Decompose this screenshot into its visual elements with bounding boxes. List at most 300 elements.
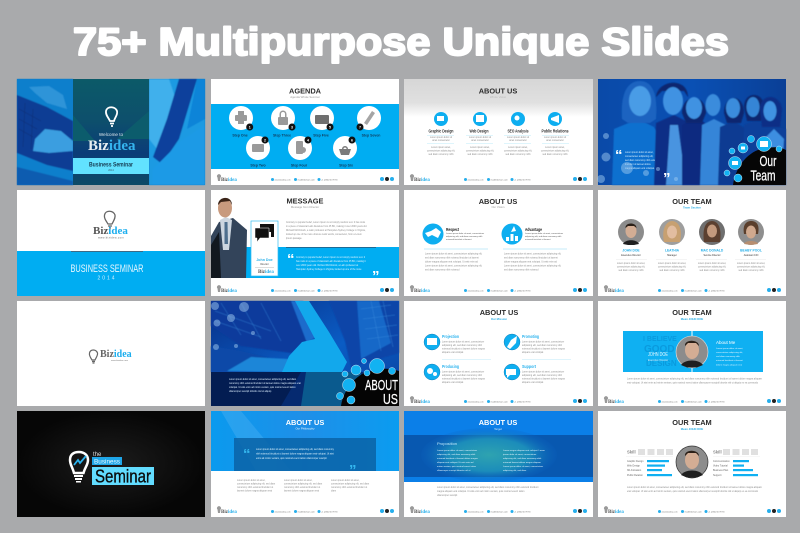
about text: Lorem ipsum dolor sit amet, consectetuer adipiscing elit, sed diam bbox=[229, 378, 296, 381]
slide: the business seminar dark bbox=[17, 411, 205, 517]
our team label: Our bbox=[760, 153, 776, 170]
band heading: Business Seminar bbox=[89, 162, 134, 168]
message text: Ipsum passage. bbox=[286, 238, 303, 240]
team roles: Executive Director bbox=[621, 254, 641, 257]
team text: Lorem ipsum dolor sit amet, bbox=[698, 262, 727, 265]
welcome text: Welcome to bbox=[99, 132, 124, 137]
heading: ABOUT US bbox=[286, 418, 324, 427]
heading: OUR TEAM bbox=[672, 418, 712, 427]
footer: Bizidea bbox=[608, 510, 624, 515]
footer: mail@domain.com bbox=[298, 511, 315, 513]
about me title: About Me bbox=[716, 340, 736, 345]
about me text bbox=[716, 347, 743, 366]
about me text: sed diam nonummy nibh bbox=[716, 356, 741, 358]
left column text: euismod tincidunt ut laoreet dolore magna bbox=[437, 457, 479, 460]
right text: sed diam nonummy nibh euismod bbox=[504, 270, 539, 272]
three columns: Lorem ipsum dolor sit amet, bbox=[284, 479, 313, 482]
cyan band bbox=[73, 158, 149, 174]
icon: bulb logo bbox=[89, 350, 98, 363]
left skill labels: Graphic Design bbox=[627, 460, 644, 463]
lorem columns: Lorem ipsum dolor sit bbox=[469, 136, 491, 139]
message text: Richard McClintock, a Latin professor at Hampden-Sydney College in Virginia, bbox=[286, 229, 366, 232]
left skill labels: Public Relation bbox=[627, 474, 644, 477]
mission text: aliquam erat volutpat bbox=[522, 381, 544, 384]
step labels: Step Two bbox=[250, 164, 266, 168]
three columns: consectetuer adipiscing elit, sed diam bbox=[331, 482, 369, 486]
subheading: Team Section bbox=[683, 206, 701, 210]
team text: Lorem ipsum dolor sit amet, bbox=[737, 262, 766, 265]
right skill labels: Business Plan bbox=[713, 469, 729, 472]
about text: ullamcorper suscipit lobortis nisl ut aliquip bbox=[229, 390, 272, 393]
lorem columns: amet consectetur bbox=[432, 139, 450, 142]
footer: +1 (234) 56 78 90 bbox=[708, 511, 725, 513]
advantage block: adipiscing elit, sed diam nonummy nibh bbox=[525, 235, 562, 238]
mission text: adipiscing elit, sed diam nonummy nibh bbox=[522, 344, 563, 347]
lorem columns: Lorem ipsum dolor sit bbox=[430, 136, 452, 139]
right text: dolore magna aliquam erat volutpat. Ut wisi enim ad bbox=[504, 260, 558, 264]
about text: nonummy nibh euismod tincidunt ut laoreet dolore magna aliquam erat bbox=[229, 382, 301, 385]
footer: mail@domain.com bbox=[490, 401, 508, 403]
mission text: adipiscing elit, sed diam nonummy nibh bbox=[442, 344, 483, 347]
left column text: Lorem ipsum dolor sit amet, consectetuer bbox=[437, 449, 477, 452]
team text: sed diam nonummy nibh bbox=[738, 270, 764, 272]
decorative bubbles bbox=[211, 302, 255, 350]
footer: www.bizidea.com bbox=[468, 401, 484, 403]
service titles: Public Relations bbox=[542, 128, 569, 134]
about me text: Lorem ipsum dolor sit amet, bbox=[716, 347, 743, 350]
footer: www.bizidea.com bbox=[468, 511, 484, 513]
quote text: has roots in a piece of classical Latin literature from 45 BC, making it bbox=[296, 260, 366, 263]
left column text: minim veniam, quis nostrud exerci tation bbox=[437, 465, 477, 468]
lorem columns: consectetuer adipiscing elit, bbox=[466, 150, 494, 152]
heading: ABOUT US bbox=[480, 308, 518, 317]
quote marks: “ bbox=[615, 147, 622, 164]
right column text: adipiscing elit, sed diam nonummy nibh bbox=[503, 457, 542, 460]
left skill labels bbox=[627, 460, 644, 477]
heading: ABOUT US bbox=[479, 86, 517, 96]
respect block: adipiscing elit, sed diam nonummy nibh bbox=[446, 235, 483, 238]
right text: sed diam nonummy nibh euismod tincidunt ut laoreet bbox=[504, 256, 558, 260]
card logo: Bizidea bbox=[258, 270, 274, 275]
dividers bbox=[626, 456, 760, 458]
slide: team portraits bbox=[598, 190, 786, 296]
footer: +1 (234) 56 78 90 bbox=[514, 290, 531, 292]
profile photo bbox=[676, 336, 708, 368]
lorem columns: Lorem ipsum amet, bbox=[508, 146, 528, 149]
about us label: ABOUT bbox=[365, 377, 398, 394]
man photo bbox=[211, 198, 247, 278]
badge numbers: 3 bbox=[291, 125, 293, 129]
slide: about us services bbox=[404, 79, 593, 185]
footer bbox=[410, 174, 587, 183]
lorem columns: amet consectetur bbox=[546, 139, 564, 142]
left text: Lorem ipsum dolor sit amet, consectetuer adipiscing elit, bbox=[425, 252, 483, 256]
three columns: nonummy nibh euismod tincidunt ut bbox=[284, 486, 320, 489]
quote text: Contrary to popular belief, Lorem Ipsum is not simply random text. It bbox=[296, 256, 365, 259]
profile panel bbox=[623, 331, 763, 372]
background words bbox=[643, 336, 677, 368]
footer bbox=[410, 396, 587, 405]
skill headings: Skill bbox=[713, 450, 722, 454]
icon circles bbox=[422, 224, 522, 244]
subheading: Our Mission bbox=[491, 317, 507, 321]
portrait: mac donald bbox=[699, 219, 725, 245]
black blob bbox=[341, 369, 399, 406]
lorem columns bbox=[427, 136, 569, 156]
team roles: Assistant CIO bbox=[744, 254, 758, 257]
about me text: euismod tincidunt ut laoreet bbox=[716, 359, 743, 362]
heading: AGENDA bbox=[289, 86, 322, 96]
heading: ABOUT US bbox=[479, 197, 517, 206]
right column text: ipsum dolor sit amet, consectetuer bbox=[503, 453, 537, 456]
title: 75+ Multipurpose Unique Slides bbox=[73, 21, 729, 64]
quote marks: ” bbox=[663, 170, 670, 187]
lorem columns: Lorem ipsum dolor sit bbox=[507, 136, 529, 139]
left text bbox=[425, 252, 483, 272]
quote marks bbox=[243, 446, 356, 479]
quote text: Lorem ipsum dolor sit amet, consectetuer adipiscing elit, sed diam nonummy bbox=[256, 448, 335, 451]
footer bbox=[604, 285, 781, 294]
badge numbers: 2 bbox=[264, 138, 266, 142]
footer: +1 (234) 56 78 90 bbox=[321, 179, 338, 181]
right text: Lorem ipsum dolor sit amet, consectetuer adipiscing elit, bbox=[504, 264, 562, 268]
team names: MAC DONALD bbox=[701, 248, 724, 252]
about me text: consectetuer adipiscing elit, bbox=[716, 351, 743, 354]
mission text: euismod tincidunt ut laoreet dolore magna bbox=[522, 378, 565, 380]
shirt photo bbox=[149, 79, 205, 185]
quote text bbox=[256, 448, 335, 460]
lorem columns: sed diam nonummy nibh bbox=[467, 154, 493, 156]
heading: MESSAGE bbox=[287, 196, 324, 206]
mission text: euismod tincidunt ut laoreet dolore magna bbox=[522, 348, 565, 350]
slide: about us vision bbox=[404, 190, 593, 296]
service text bbox=[427, 135, 569, 144]
footer bbox=[217, 174, 394, 183]
about me text: dolore magna aliquam erat bbox=[716, 364, 742, 366]
footer: mail@domain.com bbox=[684, 511, 702, 513]
heading: ABOUT US bbox=[479, 418, 517, 427]
logo url: www.bizidea.com bbox=[111, 360, 128, 362]
respect block: euismod tincidunt ut laoreet bbox=[446, 238, 472, 241]
footer bbox=[410, 285, 587, 294]
about us label: US bbox=[383, 391, 398, 408]
left column text bbox=[437, 449, 479, 472]
about text bbox=[229, 378, 301, 393]
footer: Bizidea bbox=[221, 178, 237, 183]
left text: sed diam nonummy nibh euismod bbox=[425, 270, 460, 272]
respect block: Lorem ipsum dolor sit amet, consectetuer bbox=[446, 232, 484, 235]
quote text: consectetuer adipiscing elit, bbox=[625, 155, 654, 158]
background words: I BELIEVE bbox=[643, 336, 677, 343]
team text: consectetuer adipiscing elit, bbox=[698, 266, 726, 268]
lorem columns: sed diam nonummy nibh bbox=[505, 154, 531, 156]
black blob bbox=[733, 147, 786, 185]
right skill labels: Support bbox=[713, 474, 722, 477]
mission titles: Promoting bbox=[522, 334, 539, 339]
left text: dolore magna aliquam erat volutpat. Ut wisi enim ad bbox=[425, 260, 479, 264]
footer: +1 (234) 56 78 90 bbox=[321, 290, 338, 292]
lorem columns: amet consectetur bbox=[471, 139, 489, 142]
message text: in a piece of classical Latin literature from 45 BC, making it over 2000 years old. bbox=[286, 225, 367, 228]
business tag: Business bbox=[94, 458, 121, 466]
team text: sed diam nonummy nibh bbox=[659, 270, 685, 272]
subheading: Mean JOHN DOE bbox=[681, 317, 703, 321]
badge numbers: 4 bbox=[307, 138, 309, 142]
city light beam bbox=[282, 301, 347, 372]
skill icon boxes bbox=[638, 449, 758, 455]
quote marks: ” bbox=[372, 268, 380, 285]
slide: our team photo bbox=[597, 79, 786, 187]
mission text: euismod tincidunt ut laoreet dolore magna bbox=[442, 378, 485, 380]
lorem columns: Lorem ipsum amet, bbox=[545, 146, 565, 149]
logo wordmark: Bizidea bbox=[88, 138, 136, 154]
footer: www.bizidea.com bbox=[468, 290, 484, 292]
dividers bbox=[442, 358, 571, 361]
footer: Bizidea bbox=[221, 289, 237, 294]
left column text: adipiscing elit, sed diam nonummy nibh bbox=[437, 453, 476, 456]
quote text bbox=[296, 256, 366, 271]
respect block: Respect bbox=[446, 227, 459, 232]
mission text: adipiscing elit, sed diam nonummy nibh bbox=[522, 374, 563, 377]
left text: sed diam nonummy nibh euismod tincidunt ut laoreet bbox=[425, 256, 479, 260]
lorem columns: amet consectetur bbox=[509, 139, 527, 142]
footer: Bizidea bbox=[221, 510, 237, 515]
footer: Bizidea bbox=[414, 289, 430, 294]
band year: 2014 bbox=[108, 169, 114, 172]
quote text: enim ad minim veniam, quis nostrud exerci tation ullamcorper suscipit bbox=[256, 457, 327, 460]
left skill labels: Web Design bbox=[627, 464, 641, 467]
our team label bbox=[750, 153, 776, 184]
team dividers bbox=[616, 258, 766, 260]
icon: bulb logo bbox=[104, 211, 115, 228]
center panel bbox=[73, 79, 149, 185]
card name: John Doe bbox=[256, 258, 273, 262]
seminar tag: Seminar bbox=[95, 466, 151, 486]
footer: mail@domain.com bbox=[684, 401, 702, 403]
subheading: Target bbox=[494, 427, 502, 431]
quote text: nibh euismod tincidunt ut laoreet dolore magna aliquam erat volutpat. Ut wisi bbox=[256, 452, 334, 456]
step labels: Step Six bbox=[339, 164, 353, 168]
step labels: Step Seven bbox=[362, 134, 380, 138]
quote text: sed diam nonummy nibh euis bbox=[625, 160, 656, 162]
decorative bubbles bbox=[597, 133, 678, 183]
mission text: Lorem ipsum dolor sit amet, consectetuer bbox=[442, 340, 484, 344]
service titles bbox=[428, 128, 569, 134]
left skill labels: 3D Animation bbox=[627, 469, 642, 472]
lorem columns: consectetuer adipiscing elit, bbox=[427, 150, 455, 152]
laptop photo bbox=[17, 79, 73, 185]
three columns bbox=[237, 479, 369, 492]
quote text: Hampden-Sydney College in Virginia, looked up one of the more bbox=[296, 268, 362, 271]
cyan icon circles bbox=[724, 136, 782, 182]
logo url: www.bizidea.com bbox=[98, 236, 124, 240]
right text bbox=[504, 252, 562, 272]
lorem columns: sed diam nonummy nibh bbox=[428, 154, 454, 156]
footer: +1 (234) 56 78 90 bbox=[514, 401, 531, 403]
subheading: Agenda Whole Seminar bbox=[290, 95, 320, 99]
subheading: Message from Director bbox=[291, 205, 319, 209]
advantage block bbox=[525, 227, 563, 241]
team text: sed diam nonummy nibh bbox=[618, 270, 644, 272]
footer: www.bizidea.com bbox=[468, 179, 484, 181]
mission text: aliquam erat volutpat bbox=[442, 381, 464, 384]
slide: about us target bbox=[404, 411, 593, 517]
team text bbox=[617, 262, 766, 272]
footer: +1 (234) 56 78 90 bbox=[321, 511, 338, 513]
step labels: Step One bbox=[232, 134, 248, 138]
mission titles bbox=[442, 334, 539, 369]
team roles bbox=[621, 254, 758, 257]
step labels: Step Five bbox=[313, 134, 329, 138]
three columns: Lorem ipsum dolor sit amet, bbox=[237, 479, 266, 482]
footer: Bizidea bbox=[414, 510, 430, 515]
footer: mail@domain.com bbox=[684, 290, 702, 292]
dark band bbox=[211, 372, 399, 406]
team names: BEABY POOL bbox=[740, 248, 762, 252]
lorem columns: Lorem ipsum dolor sit bbox=[544, 136, 566, 139]
footer: www.bizidea.com bbox=[662, 511, 678, 513]
team names: LEATHIA bbox=[665, 248, 680, 252]
icon: white bulb bbox=[70, 452, 88, 482]
footer: mail@domain.com bbox=[490, 179, 508, 181]
slide: about us mission bbox=[404, 301, 593, 406]
mission text bbox=[442, 340, 565, 384]
portrait: beaby pool bbox=[738, 219, 764, 245]
lorem columns: Lorem ipsum amet, bbox=[470, 146, 490, 149]
quote marks bbox=[615, 147, 670, 187]
right column text: Lorem magna aliquam erat volutpat. Lorem bbox=[503, 449, 545, 452]
slide: logo only bbox=[17, 301, 205, 406]
lorem columns: consectetuer adipiscing elit, bbox=[504, 150, 532, 152]
message text: looked up one of the more obscure Latin words, consectetur, from a Lorem bbox=[286, 233, 362, 236]
slide: team member profile bbox=[598, 301, 786, 406]
heading: BUSINESS SEMINAR bbox=[70, 263, 144, 275]
about us label bbox=[365, 377, 398, 408]
footer bbox=[604, 506, 781, 515]
quote marks: “ bbox=[287, 251, 294, 268]
left column text: ullamcorper suscipit lobortis nisl ut bbox=[437, 469, 471, 472]
three columns: nonummy nibh euismod tincidunt ut bbox=[331, 486, 367, 489]
mission text: Lorem ipsum dolor sit amet, consectetuer bbox=[522, 370, 564, 374]
quote marks: “ bbox=[243, 446, 250, 463]
three columns: laoreet dolore magna aliquam erat bbox=[237, 490, 272, 492]
lorem columns: Lorem ipsum amet, bbox=[431, 146, 451, 149]
message text bbox=[286, 221, 367, 240]
slide: about us city bbox=[211, 301, 399, 408]
subheading: Our Philosophy bbox=[295, 426, 315, 430]
skills text: Lorem ipsum dolor sit amet, consectetuer adipiscing elit, sed diam nonummy nibh euismod tincidunt ut laoreet dolore magna aliquam bbox=[627, 486, 762, 489]
cyan icon circles bbox=[336, 358, 396, 404]
service icons bbox=[434, 112, 562, 126]
footer: Bizidea bbox=[414, 400, 430, 405]
mission titles: Producing bbox=[442, 364, 459, 369]
step labels: Step Four bbox=[291, 164, 308, 168]
mission titles: Support bbox=[522, 364, 537, 369]
slide: team skills bbox=[598, 411, 786, 517]
right column text: adipiscing elit, sed diam bbox=[503, 469, 526, 472]
step circles bbox=[229, 106, 381, 160]
right skill labels: Communication bbox=[713, 460, 730, 463]
our team label: Team bbox=[750, 168, 776, 184]
slide: about us philosophy bbox=[211, 411, 399, 517]
footer: www.bizidea.com bbox=[274, 290, 291, 292]
slide: welcome cover bbox=[17, 79, 205, 185]
subheading: Our Vision bbox=[491, 205, 505, 209]
slide: business seminar cover bbox=[17, 190, 205, 296]
badge numbers: 5 bbox=[329, 125, 331, 129]
footer bbox=[604, 396, 781, 405]
icon glyphs bbox=[437, 115, 559, 123]
footer: +1 (234) 56 78 90 bbox=[708, 290, 725, 292]
target text: magna aliquam erat volutpat. Ut wisi enim ad minim veniam, quis nostrud exerci tation bbox=[437, 490, 525, 493]
proposition title: Proposition bbox=[437, 441, 457, 446]
dark band bbox=[404, 435, 593, 477]
footer: mail@domain.com bbox=[298, 179, 315, 181]
left text: Lorem ipsum dolor sit amet, consectetuer adipiscing elit, bbox=[425, 264, 483, 268]
footer: www.bizidea.com bbox=[274, 511, 291, 513]
contact card bbox=[251, 221, 278, 276]
mission text: adipiscing elit, sed diam nonummy nibh bbox=[442, 374, 483, 377]
profile photo bbox=[676, 446, 708, 478]
three columns: consectetuer adipiscing elit, sed diam bbox=[284, 482, 322, 486]
mission text: euismod tincidunt ut laoreet dolore magna bbox=[442, 348, 485, 350]
right skill bars bbox=[733, 460, 758, 476]
about text: volutpat. Ut wisi enim ad minim veniam, quis nostrud exerci tation bbox=[229, 386, 296, 389]
right skill labels: Video Tutorial bbox=[713, 464, 728, 467]
logo wordmark: Bizidea bbox=[100, 349, 132, 360]
team text: Lorem ipsum dolor sit amet, bbox=[617, 262, 646, 265]
wave swirl bbox=[421, 428, 557, 482]
dividers bbox=[424, 248, 567, 250]
team faces bbox=[622, 81, 782, 127]
three columns: laoreet dolore magna aliquam erat bbox=[284, 490, 319, 492]
lorem columns: consectetuer adipiscing elit, bbox=[541, 150, 569, 152]
portrait: john doe bbox=[618, 219, 644, 245]
left skill bars bbox=[647, 460, 672, 476]
footer bbox=[217, 506, 394, 515]
background words: DESIGN bbox=[646, 359, 677, 368]
team text: sed diam nonummy nibh bbox=[699, 270, 725, 272]
badge numbers: 1 bbox=[249, 125, 251, 129]
footer: +1 (234) 56 78 90 bbox=[708, 401, 725, 403]
buildings bbox=[211, 301, 399, 372]
icon circles bbox=[424, 334, 520, 380]
mission titles: Projection bbox=[442, 334, 459, 339]
skills text bbox=[627, 486, 762, 493]
icon glyphs bbox=[427, 336, 517, 378]
right column text bbox=[503, 449, 545, 472]
team roles: Service Director bbox=[703, 254, 721, 257]
portrait: leathia bbox=[659, 219, 685, 245]
mission text: aliquam erat volutpat bbox=[442, 351, 464, 354]
footer: www.bizidea.com bbox=[662, 401, 678, 403]
three columns: consectetuer adipiscing elit, sed diam bbox=[237, 482, 275, 486]
quote text: magna aliquam erat volutpat. bbox=[625, 167, 655, 170]
skills text: erat volutpat. Ut wisi enim ad minim veniam, quis nostrud exerci tation ullamcorper suscipit lobortis nisl ut aliquip ex ea commodo bbox=[627, 490, 759, 493]
right column text: euismod laoreet dolore magna aliquam bbox=[503, 461, 541, 464]
year: 2014 bbox=[97, 276, 117, 282]
advantage block: Lorem ipsum dolor sit amet, consectetuer bbox=[525, 232, 563, 235]
badge numbers bbox=[249, 125, 361, 142]
team silhouettes bbox=[612, 115, 786, 185]
profile text: Lorem ipsum dolor sit amet, consectetuer adipiscing elit, sed diam nonummy nibh euismod tincidunt ut laoreet dolore magna aliquam bbox=[627, 378, 762, 380]
number badges bbox=[246, 124, 364, 144]
team names bbox=[622, 248, 762, 252]
icon: bulb logo bbox=[106, 107, 117, 126]
right skill labels bbox=[713, 460, 730, 477]
footer: www.bizidea.com bbox=[662, 290, 678, 292]
profile text bbox=[627, 378, 762, 384]
